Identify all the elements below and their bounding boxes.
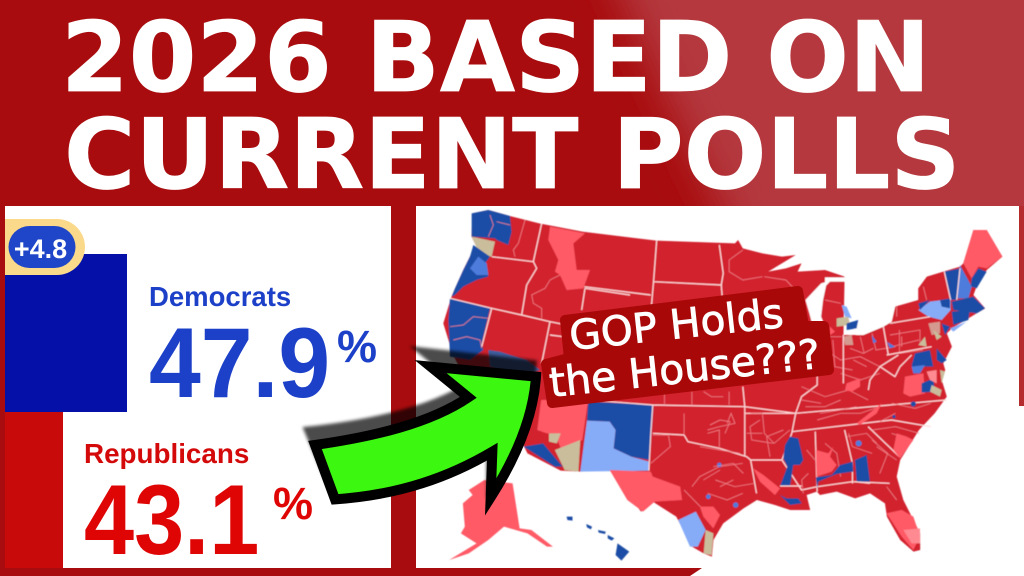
arrow body <box>315 367 536 499</box>
title: 2026 BASED ON <box>61 1 930 114</box>
new mexico <box>580 402 654 472</box>
map detail: south <box>700 401 920 550</box>
badge: margin <box>5 219 85 275</box>
badge: margin: +4.8 <box>14 234 67 264</box>
white corner <box>690 406 1024 576</box>
label: Democrats: Democrats <box>149 281 291 312</box>
hawaii <box>567 517 629 561</box>
panel: map background <box>416 206 1019 568</box>
background <box>604 0 1024 406</box>
value: Republicans: 43.1 <box>84 465 259 576</box>
value: Democrats: 47.9 <box>149 308 330 419</box>
bar: Republicans <box>5 412 63 568</box>
label: Republicans: Republicans <box>84 438 249 469</box>
arizona <box>524 400 588 472</box>
land base <box>443 210 1002 561</box>
alaska <box>449 480 553 560</box>
panel: vote share <box>5 206 391 576</box>
callout: GOP Holds the House???: the House??? <box>547 330 822 407</box>
texas patches <box>610 470 713 555</box>
map: US House districts <box>443 210 1002 561</box>
lake michigan <box>805 282 827 332</box>
value: Democrats: % <box>337 321 377 372</box>
district lines: central <box>651 250 931 510</box>
state lines: central <box>584 241 946 493</box>
map detail: northwest <box>448 210 630 377</box>
callout: GOP Holds the House???: GOP Holds <box>567 289 786 360</box>
map detail: northeast <box>825 230 1002 397</box>
arrow <box>307 351 536 499</box>
value: Republicans: % <box>273 478 313 529</box>
arrow shadow <box>307 351 533 489</box>
title <box>61 1 960 211</box>
callout: GOP Holds the House??? <box>546 289 829 407</box>
bar: Democrats <box>5 254 127 412</box>
title: CURRENT POLLS <box>64 98 960 211</box>
